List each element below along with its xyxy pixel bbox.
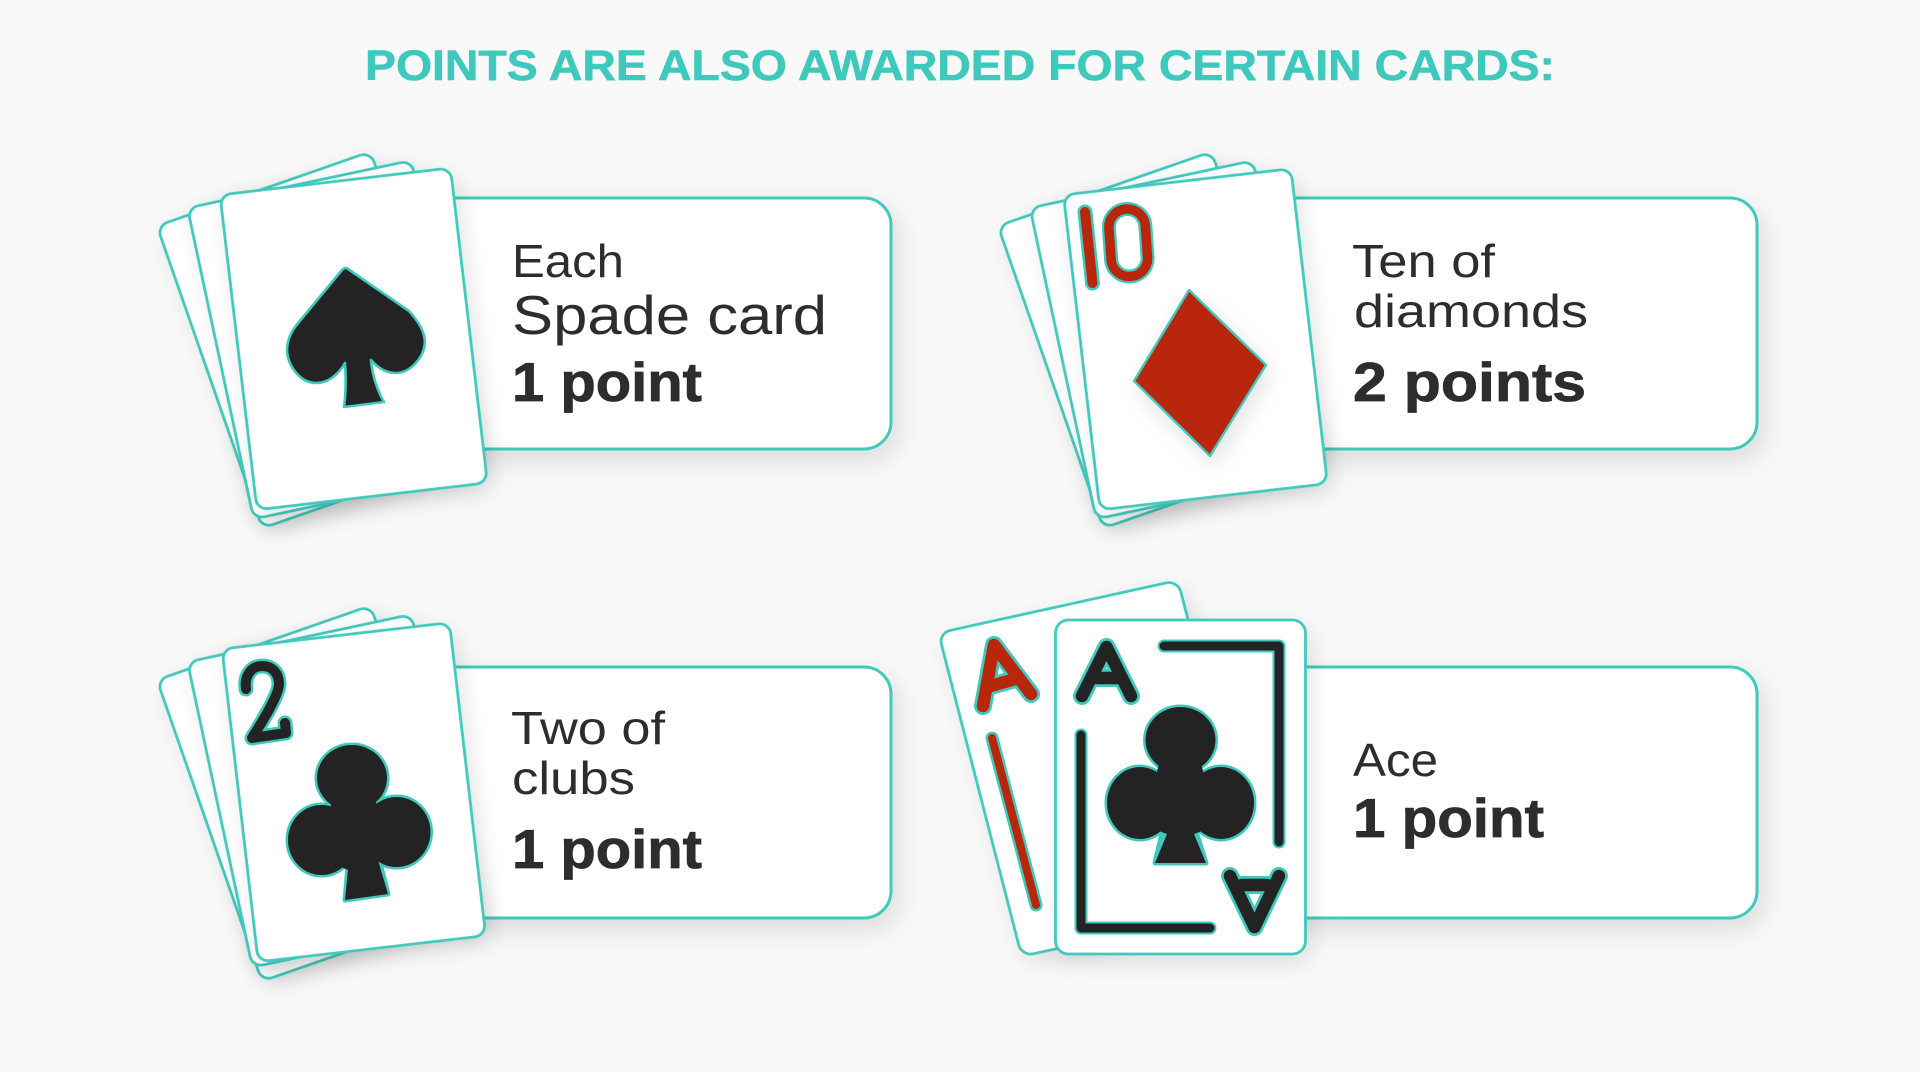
- text: each spade card 1 point: 1 point: [512, 351, 702, 413]
- text: ace 1 point: 1 point: [1353, 787, 1544, 849]
- icon: number 2: [246, 666, 286, 738]
- text: each spade card 1 point: Spade card: [512, 284, 827, 346]
- title: POINTS ARE ALSO AWARDED FOR CERTAIN CARDS:: [365, 42, 1555, 90]
- text: ten of diamonds 2 points: diamonds: [1354, 285, 1588, 337]
- text: ten of diamonds 2 points: [1352, 235, 1588, 413]
- icon: corner bracket top right: [1164, 646, 1279, 842]
- back card: red ace: [938, 580, 1261, 956]
- icon: letter A top: [1082, 647, 1131, 696]
- icon: spade: [287, 268, 425, 407]
- text: ten of diamonds 2 points: 2 points: [1353, 351, 1586, 413]
- icon: red letter A: [983, 645, 1031, 706]
- info box: ace: [1250, 667, 1757, 918]
- icon: club: [1107, 707, 1254, 863]
- fan of cards: ten of diamonds: [998, 152, 1327, 528]
- panel: each spade card: [157, 152, 891, 528]
- text: ace 1 point: [1353, 734, 1544, 849]
- icon: letter A inverted bottom: [1230, 876, 1279, 927]
- panel: ace: [938, 580, 1757, 956]
- icon: number 10: [1085, 208, 1149, 283]
- text: two of clubs 1 point: [511, 702, 702, 880]
- text: each spade card 1 point: [512, 235, 827, 413]
- text: ten of diamonds 2 points: Ten of: [1352, 235, 1495, 287]
- fan of cards: two of clubs: [157, 606, 486, 981]
- fan of cards: spade: [157, 152, 487, 528]
- text: two of clubs 1 point: Two of: [511, 702, 665, 754]
- icon: corner bracket bottom left: [1081, 735, 1210, 928]
- panel: two of clubs: [157, 606, 891, 981]
- panel: ten of diamonds: [998, 152, 1757, 528]
- info box: two of clubs: [400, 667, 891, 918]
- icon: diamond: [1134, 290, 1266, 456]
- front card: ace of clubs: [1056, 620, 1306, 954]
- icon: club: [288, 745, 430, 900]
- red bar: [992, 738, 1036, 905]
- info box: ten of diamonds: [1220, 198, 1757, 449]
- text: ace 1 point: Ace: [1353, 734, 1438, 786]
- text: each spade card 1 point: Each: [512, 235, 624, 287]
- text: two of clubs 1 point: clubs: [512, 752, 635, 804]
- info box: spade: [400, 198, 891, 449]
- text: two of clubs 1 point: 1 point: [512, 818, 702, 880]
